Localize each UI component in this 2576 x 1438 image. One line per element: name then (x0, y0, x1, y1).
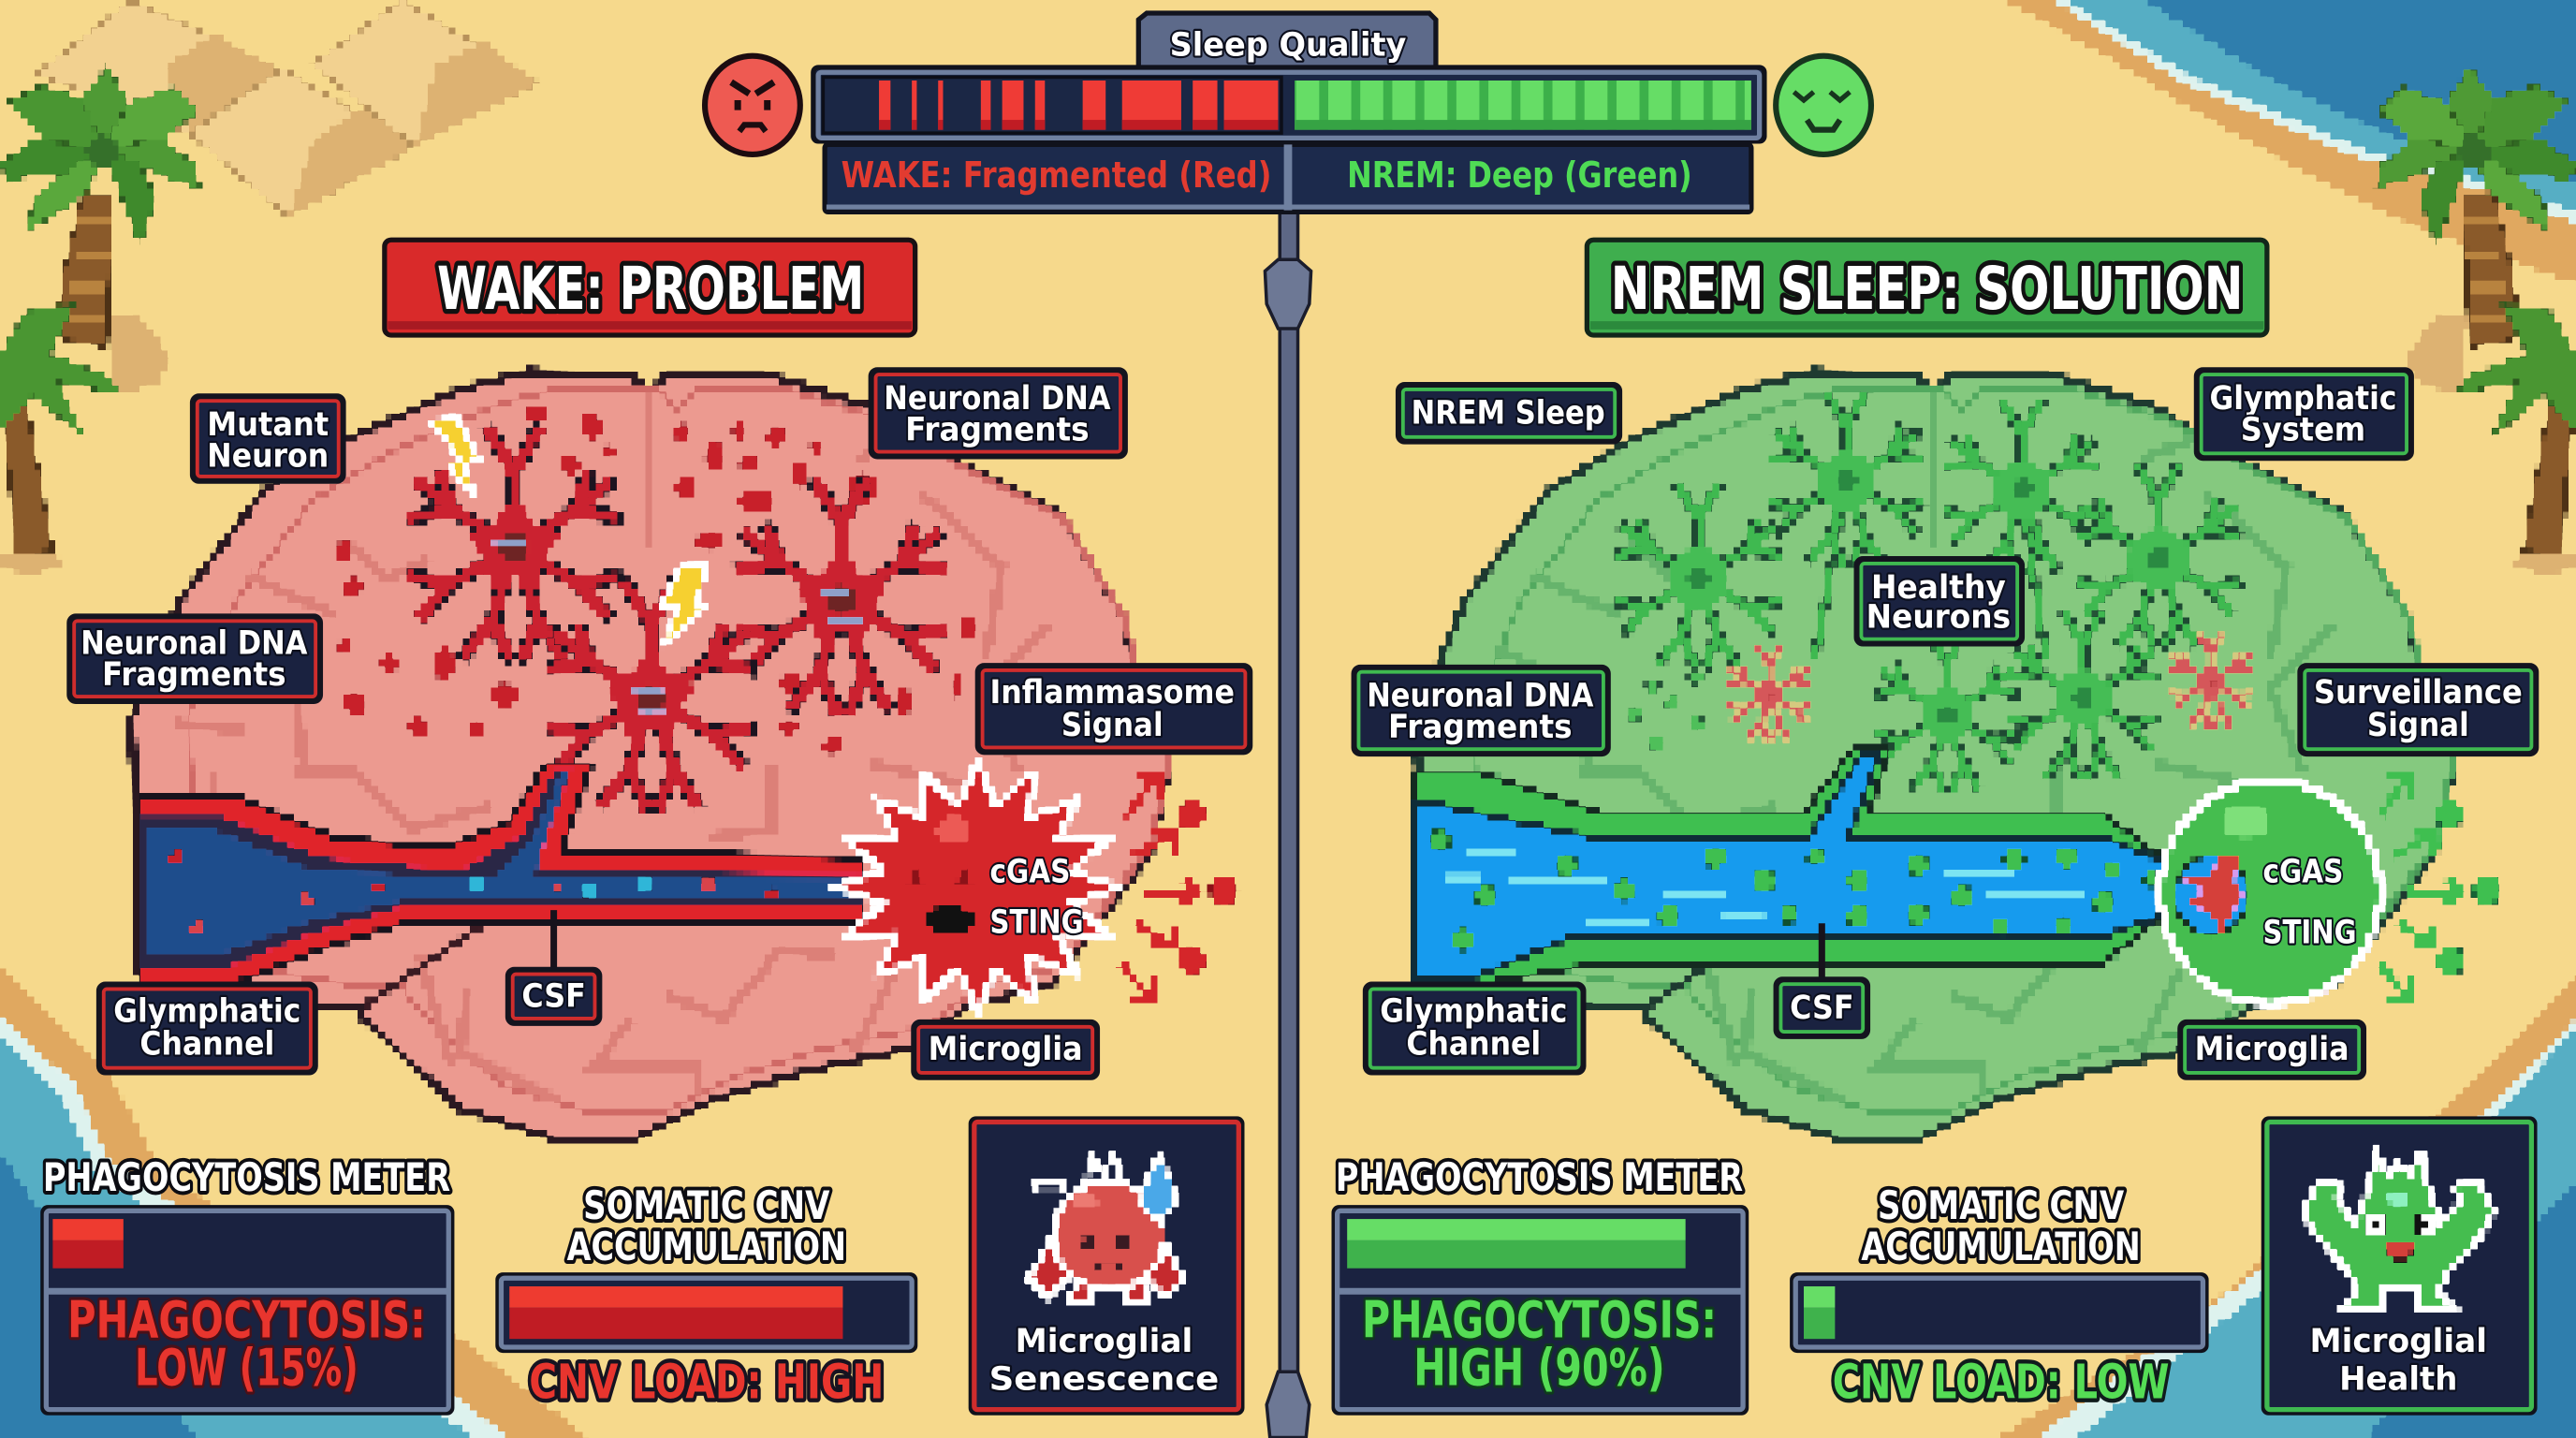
deep green segments (1295, 81, 1751, 130)
sleep quality tab: Sleep Quality (1170, 26, 1406, 65)
label: CSF left: CSF (521, 977, 586, 1016)
microglia text: cGAS STING, wake: cGAS (989, 852, 1070, 890)
label: Neuronal DNA Fragments right (1355, 668, 1606, 753)
nrem meter fill 90% (1347, 1219, 1686, 1269)
red bar lower shade (879, 120, 1278, 130)
panel: somatic CNV, nrem: SOMATIC CNV (1878, 1182, 2125, 1228)
flow streaks (1445, 851, 2085, 920)
legend box: WAKE: Fragmented (Red) (842, 154, 1271, 197)
microglia text: cGAS STING, wake (989, 852, 1084, 942)
label: CSF right (1778, 981, 1866, 1035)
panel: somatic CNV, wake: CNV LOAD: HIGH (529, 1354, 884, 1409)
axons (1815, 481, 2045, 657)
glymphatic channel: wake (clogged) (139, 764, 862, 986)
dunes (37, 0, 537, 217)
label: Healthy Neurons: Neurons (1866, 597, 2011, 636)
healthy neuron 4 (2081, 469, 2236, 644)
bottom-left ocean (0, 966, 592, 1438)
legend box: NREM: Deep (Green) (1347, 154, 1692, 197)
label: Glymphatic Channel right (1367, 986, 1582, 1071)
panel: somatic CNV, nrem (1793, 1182, 2206, 1409)
panel: somatic CNV, wake (498, 1182, 915, 1409)
red brain (132, 372, 1170, 1140)
healthy neuron 6 (2012, 616, 2155, 776)
label: Neuronal DNA Fragments top (872, 372, 1124, 455)
label: Microglia right: Microglia (2195, 1030, 2349, 1068)
label: Glymphatic System: Glymphatic (2209, 379, 2397, 418)
inflammatory signal arrows and dots (1120, 777, 1237, 1001)
icon: sweat drop (1142, 1153, 1175, 1217)
label: Surveillance Signal (2302, 667, 2535, 753)
glymphatic channel: nrem (flowing) (1416, 749, 2185, 986)
card: microglial senescence (971, 1119, 1242, 1413)
sleep quality bar (813, 67, 1764, 141)
label: Neuronal DNA Fragments top: Fragments (905, 410, 1090, 448)
icon: healthy microglia (2303, 1150, 2494, 1311)
label: Microglia right (2182, 1023, 2363, 1076)
label: Glymphatic System: System (2241, 410, 2365, 448)
label: Inflammasome Signal: Inflammasome (989, 673, 1235, 712)
card: microglial health: Health (2339, 1360, 2457, 1399)
label: Surveillance Signal: Signal (2367, 706, 2469, 744)
panel: somatic CNV, wake: SOMATIC CNV (583, 1182, 830, 1228)
particles in clogged channel (169, 851, 779, 934)
microglia: healthy body (2160, 781, 2380, 1004)
DNA fragments (335, 405, 977, 754)
label: Glymphatic Channel right: Glymphatic (1380, 992, 1567, 1031)
cleared particles (1428, 830, 2160, 950)
microglia: activated body (833, 761, 1121, 1013)
card: microglial senescence: Microglial (1016, 1322, 1193, 1360)
panel: somatic CNV, nrem: CNV LOAD: LOW (1833, 1354, 2169, 1409)
healthy neuron 1 (1773, 396, 1920, 562)
label: Glymphatic Channel left: Channel (139, 1025, 274, 1064)
happy face (1776, 56, 1871, 154)
label: Healthy Neurons: Healthy (1871, 568, 2006, 607)
label: Neuronal DNA Fragments left: Neuronal DNA (80, 624, 307, 662)
title: wake problem (385, 240, 915, 335)
mutant neuron 1 (415, 433, 614, 656)
healthy neuron 2 (1949, 404, 2096, 570)
mutant neuron 2 (741, 485, 941, 709)
label: CSF left (509, 971, 598, 1022)
label: Glymphatic System (2198, 372, 2410, 457)
center divider (1265, 205, 1311, 1437)
card: microglial senescence: Senescence (989, 1360, 1219, 1399)
label: Healthy Neurons (1858, 560, 2021, 642)
CSF connector lines (554, 910, 1822, 982)
palm trees right (2376, 66, 2576, 573)
microglia text: cGAS STING, nrem (2262, 852, 2357, 951)
label: Glymphatic Channel left: Glymphatic (113, 992, 300, 1031)
small red neuron 2 (2173, 637, 2250, 725)
label: Mutant Neuron: Mutant (207, 405, 329, 444)
label: Glymphatic Channel right: Channel (1406, 1025, 1541, 1064)
panel: phagocytosis meter, wake (43, 1154, 452, 1413)
card: microglial health: Microglial (2310, 1322, 2487, 1360)
wake meter fill 15% (52, 1219, 124, 1269)
small red neuron 1 (1730, 650, 1808, 738)
green brain (1416, 372, 2454, 1140)
healthy neuron 5 (1880, 638, 2013, 788)
label: Surveillance Signal: Surveillance (2314, 673, 2523, 712)
legend box (825, 144, 1751, 212)
lightning bolt 1 (431, 418, 480, 499)
panel: phagocytosis meter, nrem (1334, 1154, 1747, 1413)
panel: phagocytosis meter, wake: LOW (15%) (135, 1338, 359, 1397)
label: Inflammasome Signal (979, 667, 1249, 751)
palm trees left (0, 66, 200, 573)
label: Microglia left (915, 1023, 1096, 1076)
angry face (705, 56, 800, 154)
microglia text: cGAS STING, nrem: STING (2262, 913, 2357, 951)
panel: phagocytosis meter, wake: PHAGOCYTOSIS: (67, 1290, 426, 1349)
sleep quality tab (1138, 13, 1436, 69)
icon: senescent microglia (1029, 1153, 1183, 1304)
label: Mutant Neuron (194, 398, 342, 479)
label: Neuronal DNA Fragments left: Fragments (102, 655, 286, 694)
label: Glymphatic Channel left (100, 986, 314, 1071)
top-right ocean (2002, 0, 2576, 285)
label: Neuronal DNA Fragments top: Neuronal DNA (884, 379, 1110, 418)
fragmented red segments (879, 81, 1278, 130)
mutant neuron 3 (553, 586, 748, 805)
panel: somatic CNV, wake: ACCUMULATION (567, 1224, 846, 1269)
panel: somatic CNV, nrem: ACCUMULATION (1861, 1224, 2141, 1269)
title: wake problem: WAKE: PROBLEM (437, 254, 864, 323)
wake CNV fill (509, 1286, 842, 1339)
label: Neuronal DNA Fragments left (71, 618, 319, 700)
label: Inflammasome Signal: Signal (1061, 706, 1164, 744)
healthy neuron 3 (1620, 489, 1777, 664)
title: nrem solution (1587, 240, 2267, 335)
label: Mutant Neuron: Neuron (207, 436, 329, 475)
bottom-right ocean (1995, 975, 2576, 1438)
card: microglial health (2263, 1119, 2535, 1413)
panel: phagocytosis meter, nrem: HIGH (90%) (1413, 1338, 1665, 1397)
panel: phagocytosis meter, nrem: PHAGOCYTOSIS METER (1336, 1154, 1743, 1200)
title: nrem solution: NREM SLEEP: SOLUTION (1611, 254, 2243, 323)
nrem CNV fill (1804, 1286, 1835, 1339)
surveillance signal arrows and dots (2378, 777, 2501, 1001)
microglia text: cGAS STING, nrem: cGAS (2262, 852, 2343, 890)
panel: phagocytosis meter, wake: PHAGOCYTOSIS METER (43, 1154, 450, 1200)
label: CSF right: CSF (1790, 989, 1854, 1027)
panel: phagocytosis meter, nrem: PHAGOCYTOSIS: (1362, 1290, 1717, 1349)
label: Neuronal DNA Fragments right: Fragments (1388, 708, 1573, 746)
label: NREM Sleep (1399, 386, 1618, 440)
lightning bolt 2 (661, 564, 710, 644)
label: NREM Sleep: NREM Sleep (1412, 394, 1605, 433)
label: Neuronal DNA Fragments right: Neuronal DNA (1367, 677, 1593, 715)
green debris dots (1627, 669, 1705, 750)
microglia text: cGAS STING, wake: STING (989, 903, 1084, 942)
label: Microglia left: Microglia (929, 1030, 1083, 1068)
